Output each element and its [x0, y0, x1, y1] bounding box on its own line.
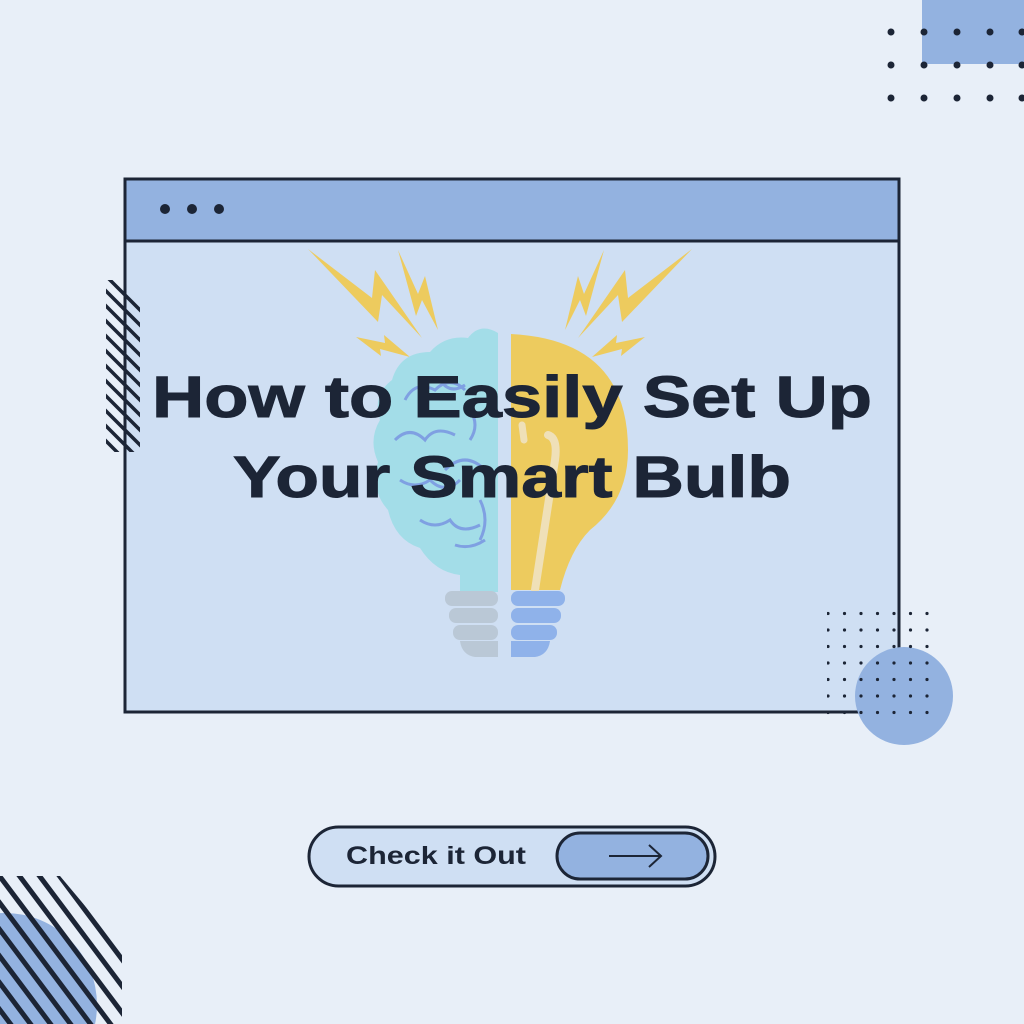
decoration: left stripes — [106, 280, 140, 452]
decoration: bottom-left circle with stripes — [0, 876, 122, 1024]
decoration: top-right square and dots — [888, 0, 1024, 102]
title: Your Smart Bulb — [233, 445, 791, 510]
panel: browser window — [125, 179, 899, 712]
button: check it out — [309, 827, 715, 886]
title: How to Easily Set Up — [152, 365, 872, 430]
title — [152, 365, 872, 510]
brain half — [373, 329, 498, 592]
bulb half — [511, 334, 628, 590]
lightning bolts — [308, 249, 692, 357]
illustration: brain and bulb — [308, 249, 692, 657]
button: check it out: Check it Out — [346, 842, 527, 870]
bases — [445, 591, 498, 657]
decoration: dotted grid and circle — [827, 609, 953, 745]
